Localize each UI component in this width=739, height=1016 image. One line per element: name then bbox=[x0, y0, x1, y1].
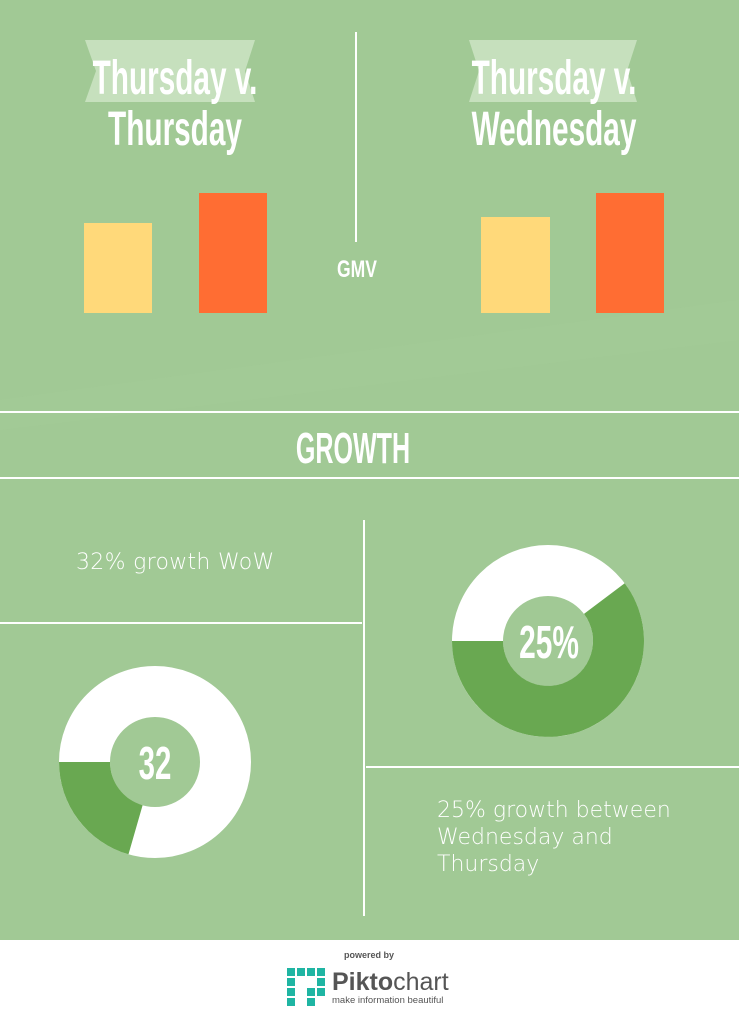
title right: Thursday v. Wednesday bbox=[469, 40, 637, 156]
GMV label: GMV bbox=[337, 256, 377, 283]
title right: Thursday v. Wednesday: Wednesday bbox=[472, 103, 636, 156]
footer: powered by Piktochart: powered by bbox=[344, 950, 394, 960]
footer: powered by Piktochart: Piktochart bbox=[332, 968, 449, 996]
bar chart right bbox=[481, 193, 664, 313]
text: 25% growth between Wednesday and Thursday: Thursday bbox=[437, 852, 539, 877]
title right: Thursday v. Wednesday: Thursday v. bbox=[472, 52, 636, 105]
donut chart 25% bbox=[452, 570, 644, 737]
icon: piktochart logo bbox=[287, 968, 325, 1006]
footer: powered by Piktochart: make information beautiful bbox=[332, 995, 443, 1006]
title left: Thursday v. Thursday: Thursday v. bbox=[93, 52, 257, 105]
text: 25% growth between Wednesday and Thursday: Wednesday and bbox=[437, 825, 613, 850]
footer: powered by Piktochart bbox=[287, 950, 449, 1006]
title left: Thursday v. Thursday bbox=[85, 40, 257, 156]
donut chart 32 bbox=[59, 692, 225, 854]
bar chart left bbox=[84, 193, 267, 313]
ribbon right bbox=[469, 40, 637, 102]
heading: GROWTH: GROWTH bbox=[296, 424, 410, 473]
title left: Thursday v. Thursday: Thursday bbox=[108, 103, 242, 156]
ribbon left bbox=[85, 40, 255, 102]
donut chart 25%: 25% bbox=[519, 618, 579, 669]
text: 32% growth WoW: 32% growth WoW bbox=[76, 550, 275, 575]
donut chart 32: 32 bbox=[139, 739, 171, 790]
text: 25% growth between Wednesday and Thursday: 25% growth between bbox=[437, 798, 671, 823]
